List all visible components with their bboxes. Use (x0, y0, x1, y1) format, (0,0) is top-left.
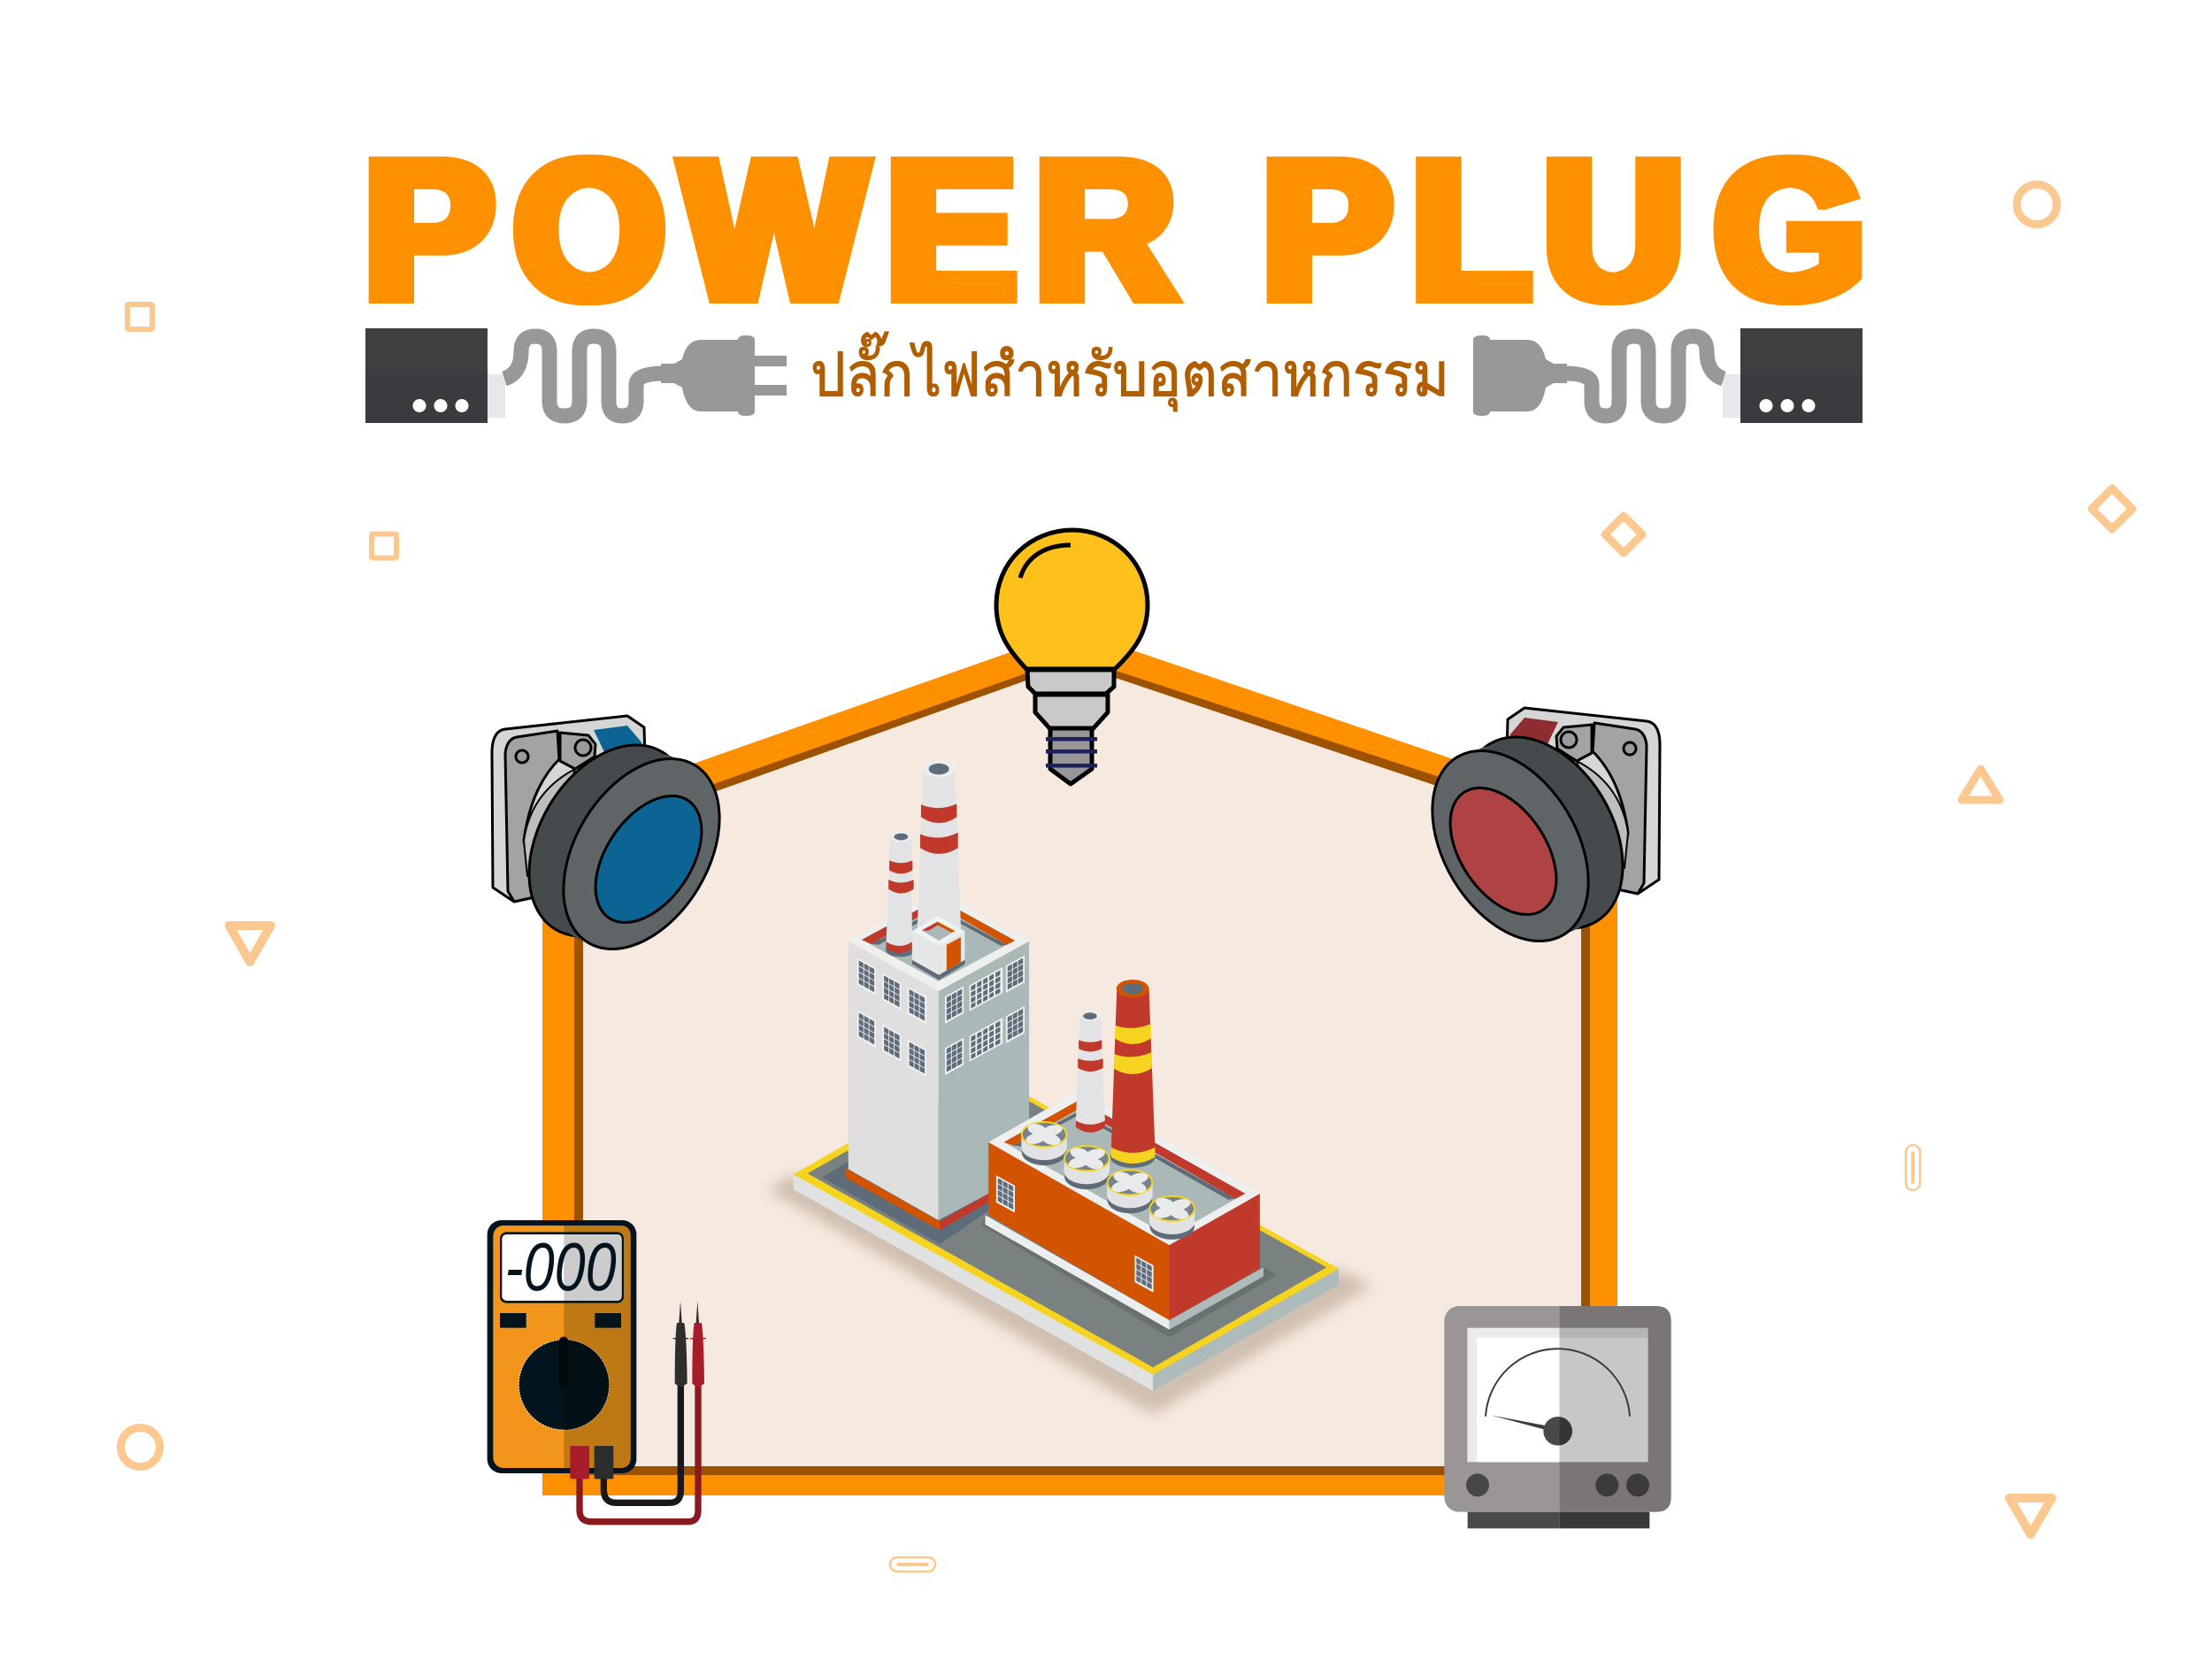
blue cap (573, 777, 724, 941)
lead connectors (570, 1446, 613, 1479)
icon: right socket box, cable and plug (1473, 328, 1863, 423)
shape: circle bottom left (120, 1428, 159, 1467)
icon: red socket (1400, 708, 1660, 969)
display reading: -000 (505, 1230, 617, 1305)
black probe (673, 1301, 688, 1387)
plug (1473, 335, 1567, 416)
illustration: isometric factory (767, 760, 1372, 1415)
shape: square top left (127, 304, 152, 329)
gauge face (1467, 1328, 1648, 1462)
side lug (1556, 725, 1592, 761)
plate inner (505, 731, 559, 902)
display (500, 1232, 624, 1303)
plug (661, 335, 787, 416)
bulb neck (1035, 695, 1108, 730)
light crescent (524, 769, 575, 876)
buttons (500, 1313, 621, 1328)
front ring (1400, 723, 1621, 969)
bulb collar (1027, 670, 1114, 694)
gauge knobs (1466, 1473, 1649, 1496)
shape: triangle down right (2009, 1498, 2052, 1534)
cable (1564, 336, 1724, 416)
shape: diamond far right (2092, 488, 2132, 529)
socket box (365, 328, 505, 423)
shape: triangle down left (229, 926, 271, 962)
red chimney (1110, 980, 1155, 1168)
red probe (690, 1301, 706, 1387)
fans front (1107, 1170, 1194, 1240)
tower building (845, 760, 1029, 1230)
test lead cables (580, 1383, 698, 1522)
icon: left socket box, cable and plug (365, 328, 787, 423)
short chimney (1076, 1011, 1105, 1133)
meter case (488, 1220, 636, 1473)
base shadow (767, 1174, 1372, 1415)
gauge needle (1491, 1415, 1572, 1446)
icon: analog gauge (1444, 1306, 1671, 1528)
blue tab (594, 726, 642, 754)
short chimney (886, 832, 915, 957)
subtitle: ปลั๊กไฟสำหรับอุตสาหกรรม (810, 331, 1449, 411)
tall chimney (918, 760, 961, 934)
gauge base (1468, 1512, 1649, 1528)
cable (504, 336, 664, 416)
bulb glass (996, 530, 1148, 669)
back plate (1507, 708, 1660, 894)
bulb screw (1046, 728, 1097, 784)
red tab (1509, 718, 1558, 746)
shape: pill bottom (890, 1557, 935, 1572)
dial (518, 1337, 609, 1430)
red building (982, 980, 1277, 1337)
gauge scale arc (1486, 1349, 1630, 1417)
title: POWER PLUG (365, 119, 1865, 340)
meter body (493, 1226, 631, 1468)
panel: house frame (542, 630, 1617, 1495)
back plate (492, 716, 645, 902)
plate inner (1593, 723, 1647, 894)
front ring (531, 731, 752, 977)
socket box (1723, 328, 1863, 423)
icon: multimeter (488, 1220, 706, 1522)
decorative shapes (120, 184, 2132, 1572)
dark back ring (496, 717, 721, 964)
shape: circle top right (2017, 184, 2056, 225)
icon: blue socket (492, 716, 752, 977)
small windows (996, 1175, 1154, 1293)
base slab (794, 1068, 1339, 1391)
light crescent (1577, 761, 1628, 868)
roof box (912, 916, 965, 980)
side lug (560, 733, 595, 769)
red cap (1428, 769, 1578, 934)
shape: square left (372, 534, 396, 557)
dark back ring (1431, 709, 1655, 957)
shape: diamond centre right (1605, 516, 1642, 553)
icon: light bulb (996, 530, 1148, 784)
windows left face (857, 958, 926, 1077)
gauge body (1444, 1306, 1671, 1512)
windows right face (945, 956, 1025, 1075)
bulb highlight (1020, 545, 1071, 578)
shape: triangle up right (1962, 769, 2000, 800)
shape: pill right (1906, 1145, 1920, 1190)
fans (1021, 1122, 1110, 1189)
